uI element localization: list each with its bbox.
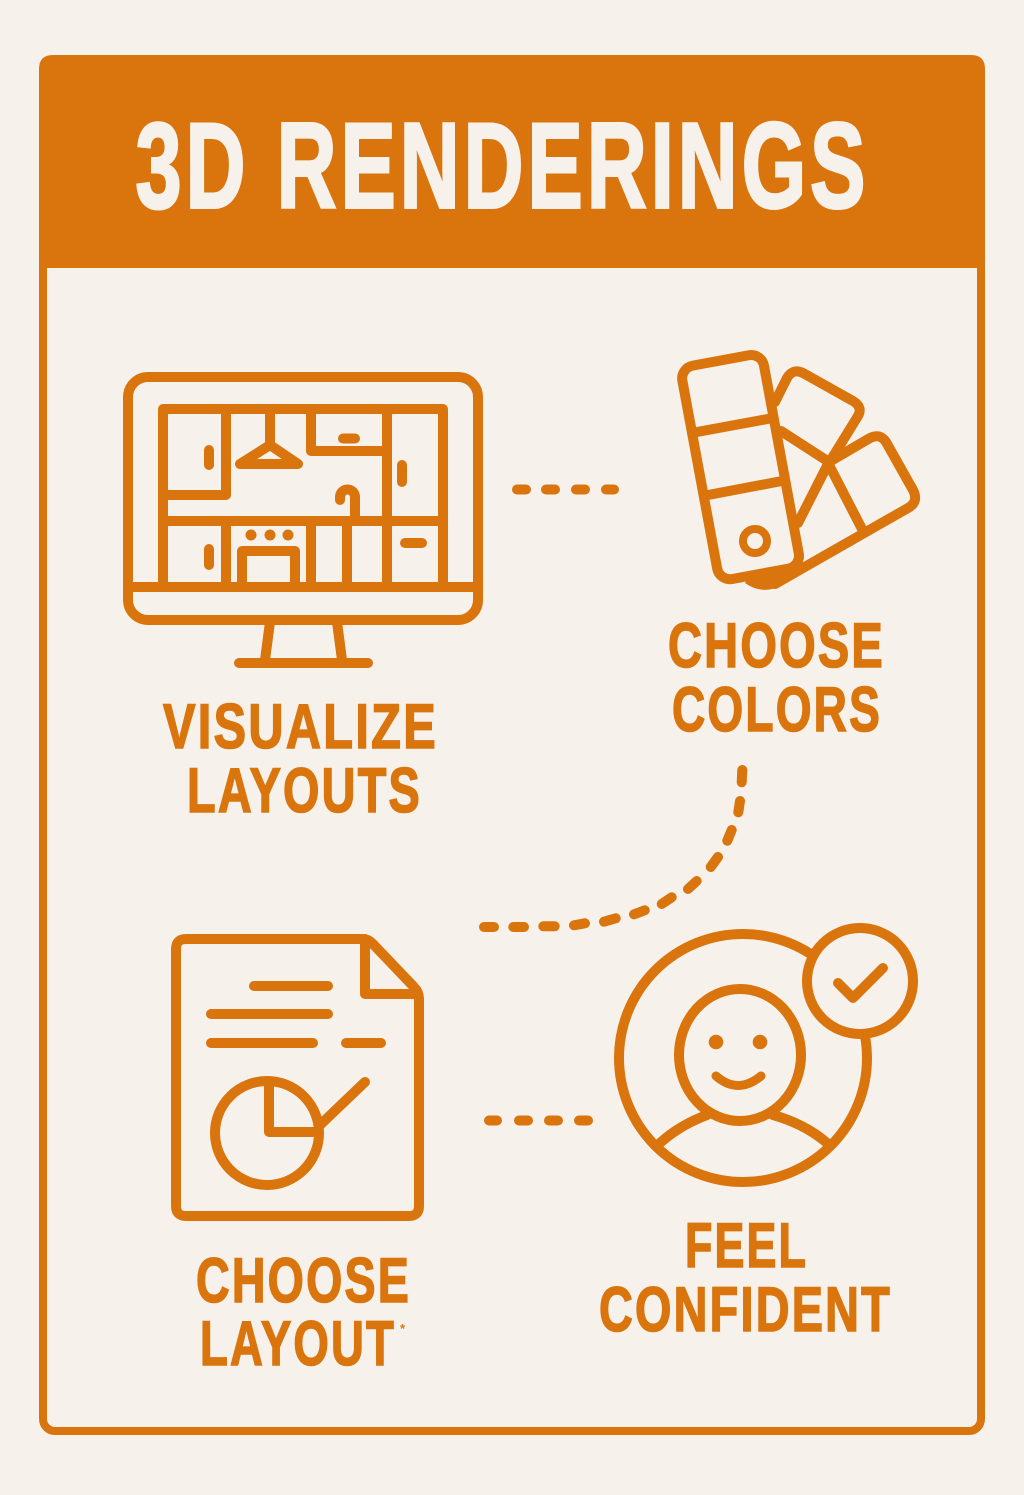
label: visualize layouts (163, 692, 438, 826)
icon: smiling person with check badge (619, 928, 913, 1182)
label: choose colors: CHOOSE (668, 611, 885, 681)
icon: document with pie chart (176, 939, 419, 1216)
label: visualize layouts: LAYOUTS (187, 756, 422, 826)
label: feel confident (599, 1211, 892, 1345)
arrow: curved dashes from swatches to document (484, 770, 742, 927)
icon: monitor with kitchen layout (128, 377, 478, 663)
label: visualize layouts: VISUALIZE (163, 692, 438, 762)
label: feel confident: CONFIDENT (599, 1275, 892, 1345)
icon: color swatch fan (680, 353, 915, 590)
label: choose layout: * (400, 1321, 406, 1336)
label: choose layout: CHOOSE (196, 1246, 411, 1316)
arrow: dashes from monitor to swatches (517, 484, 614, 494)
label: choose colors (668, 611, 885, 745)
panel: header band (39, 55, 985, 268)
label: choose layout: LAYOUT (200, 1309, 396, 1379)
label: choose layout (196, 1246, 411, 1379)
label: feel confident: FEEL (685, 1211, 808, 1281)
label: choose colors: COLORS (672, 675, 882, 745)
arrow: dashes from document to person (489, 1116, 588, 1126)
